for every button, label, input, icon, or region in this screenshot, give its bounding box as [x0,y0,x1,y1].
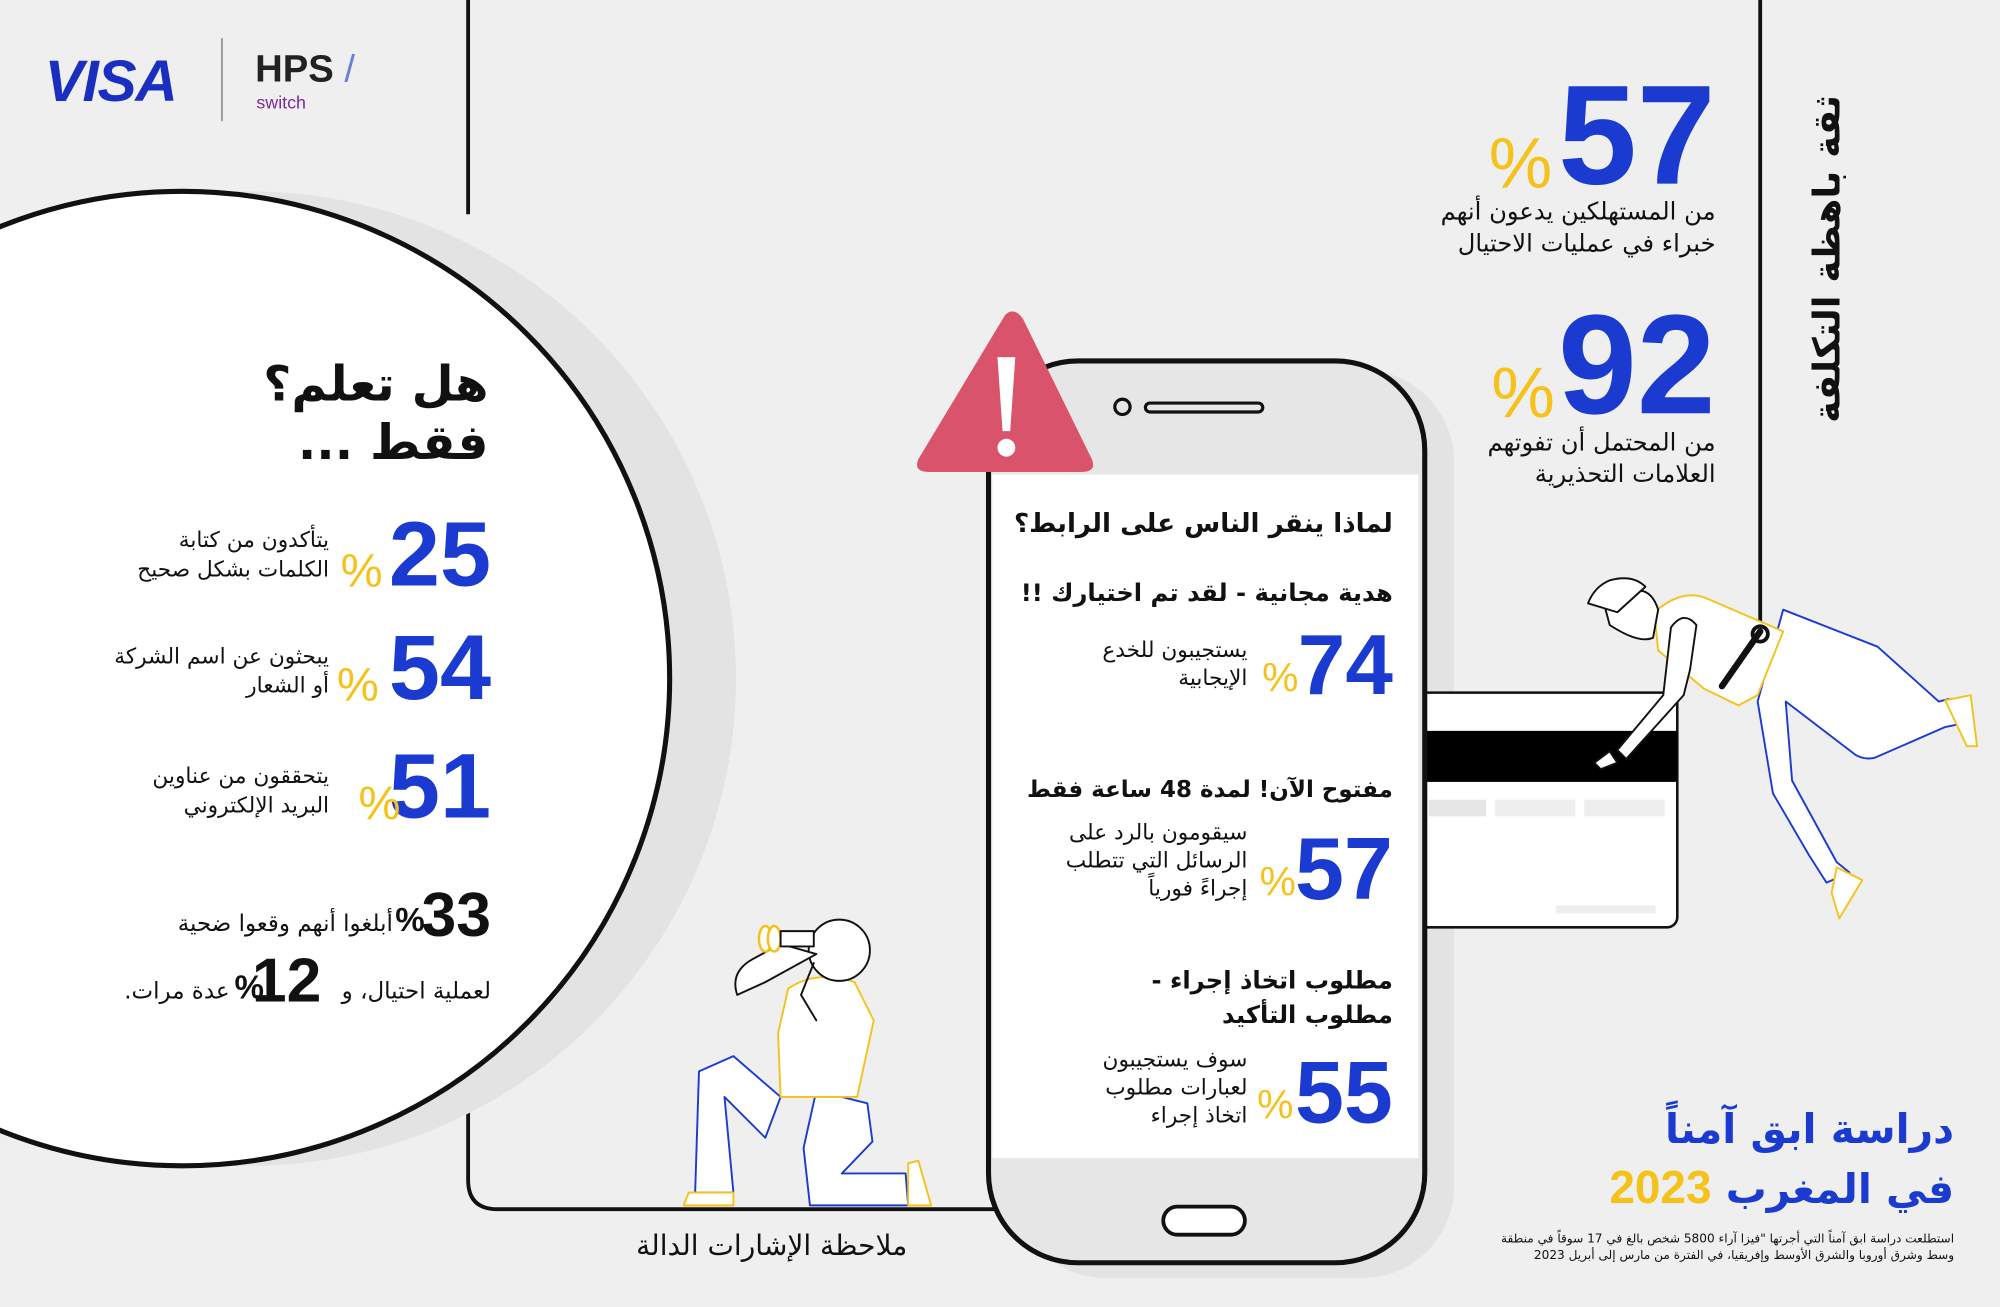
footnote [1501,1230,1954,1263]
caption: noticing signs: ملاحظة الإشارات الدالة [636,1231,907,1263]
phone screen content: % [1257,1082,1293,1128]
phone screen content: 74 [1298,617,1393,713]
phone screen content: % [1260,858,1296,904]
stat 33 / 12: 12 [252,946,321,1015]
stat top 92: 92 [1558,286,1716,444]
circle panel [0,191,670,1166]
phone screen content: يستجيبون للخدع [1102,638,1247,663]
stat 54 [114,617,491,719]
vertical title: ثقة باهظة التكلفة [1805,95,1848,423]
stat 33 / 12: 33 [422,881,491,950]
stat 33 / 12: % [395,901,425,939]
stat 33 / 12: لعملية احتيال، و [342,978,491,1005]
stat top 57: % [1489,122,1552,203]
phone screen content: لعبارات مطلوب [1105,1075,1247,1101]
stat top 57: 57 [1558,56,1716,214]
stat 33 / 12 [124,881,491,1015]
heading: did you know: هل تعلم؟ [263,356,489,412]
stat 51: 51 [389,736,491,838]
stat top 92: % [1491,352,1555,432]
stat 54: 54 [389,617,491,719]
item 3: مطلوب اتخاذ إجراء - [1151,967,1393,995]
stat top 92 [1487,286,1716,489]
credit card [1403,693,1677,927]
stat 25 [137,504,491,606]
footnote: وسط وشرق أوروبا والشرق الأوسط وإفريقيا، في الفترة من مارس إلى أبريل 2023 [1534,1249,1954,1263]
stat 54: يبحثون عن اسم الشركة [114,644,329,670]
stat top 57: من المستهلكين يدعون أنهم [1441,198,1716,226]
stat 54: % [337,658,379,710]
logo: HPS switch: HPS / [255,48,355,91]
phone screen content: سوف يستجيبون [1103,1047,1247,1073]
stat 25: 25 [389,504,491,606]
footnote: استطلعت دراسة ابق آمناً التي أجرتها "فيزا آراء 5800 شخص بالغ في 17 سوقاً في منطقة [1501,1232,1954,1246]
phone screen content: 57 [1295,820,1393,918]
heading: did you know [263,356,489,471]
item 3: مطلوب التأكيد [1222,1001,1393,1029]
phone screen content: الإيجابية [1178,666,1247,691]
phone screen content: إجراءً فورياً [1148,876,1247,902]
phone screen content [1014,508,1393,1142]
item 3 [1151,967,1393,1029]
phone screen content: 55 [1295,1043,1393,1142]
phone screen content: سيقومون بالرد على [1069,820,1247,846]
study title: دراسة ابق آمناً [1665,1105,1954,1153]
stat 51 [152,736,491,838]
stat 33 / 12: عدة مرات. [124,978,230,1005]
stat 51: يتحققون من عناوين [152,764,329,790]
logo: VISA: VISA [45,47,176,114]
phone screen content: % [1262,654,1298,700]
phone [989,361,1425,1263]
stat 25: الكلمات بشكل صحيح [137,557,329,583]
heading: did you know: فقط ... [298,415,489,471]
item 1: هدية مجانية - لقد تم اختيارك !! [1021,579,1393,607]
phone screen content: اتخاذ إجراء [1151,1103,1247,1129]
icon: warning triangle [917,311,1093,472]
stat top 57 [1441,56,1716,258]
study title: في المغرب 2023 [1609,1161,1954,1213]
stat 25: % [341,545,383,597]
stat top 92: العلامات التحذيرية [1535,460,1716,489]
item 2: مفتوح الآن! لمدة 48 ساعة فقط [1027,777,1393,804]
stat 33 / 12: أبلغوا أنهم وقعوا ضحية [178,911,393,937]
study title [1609,1100,1954,1213]
stat top 92: من المحتمل أن تفوتهم [1487,429,1716,457]
logo: HPS switch: switch [256,92,306,112]
stat 33 / 12: % [235,968,264,1006]
figure: person with binoculars [684,920,931,1205]
stat 51: % [359,777,401,829]
screen heading: لماذا ينقر الناس على الرابط؟ [1014,508,1393,538]
stat top 57: خبراء في عمليات الاحتيال [1458,230,1716,258]
logo: HPS switch [255,48,355,112]
stat 51: البريد الإلكتروني [184,793,329,819]
stat 25: يتأكدون من كتابة [179,528,329,554]
stat 54: أو الشعار [246,673,329,699]
figure: flying person [1588,578,1977,918]
phone screen content: الرسائل التي تتطلب [1066,848,1247,874]
